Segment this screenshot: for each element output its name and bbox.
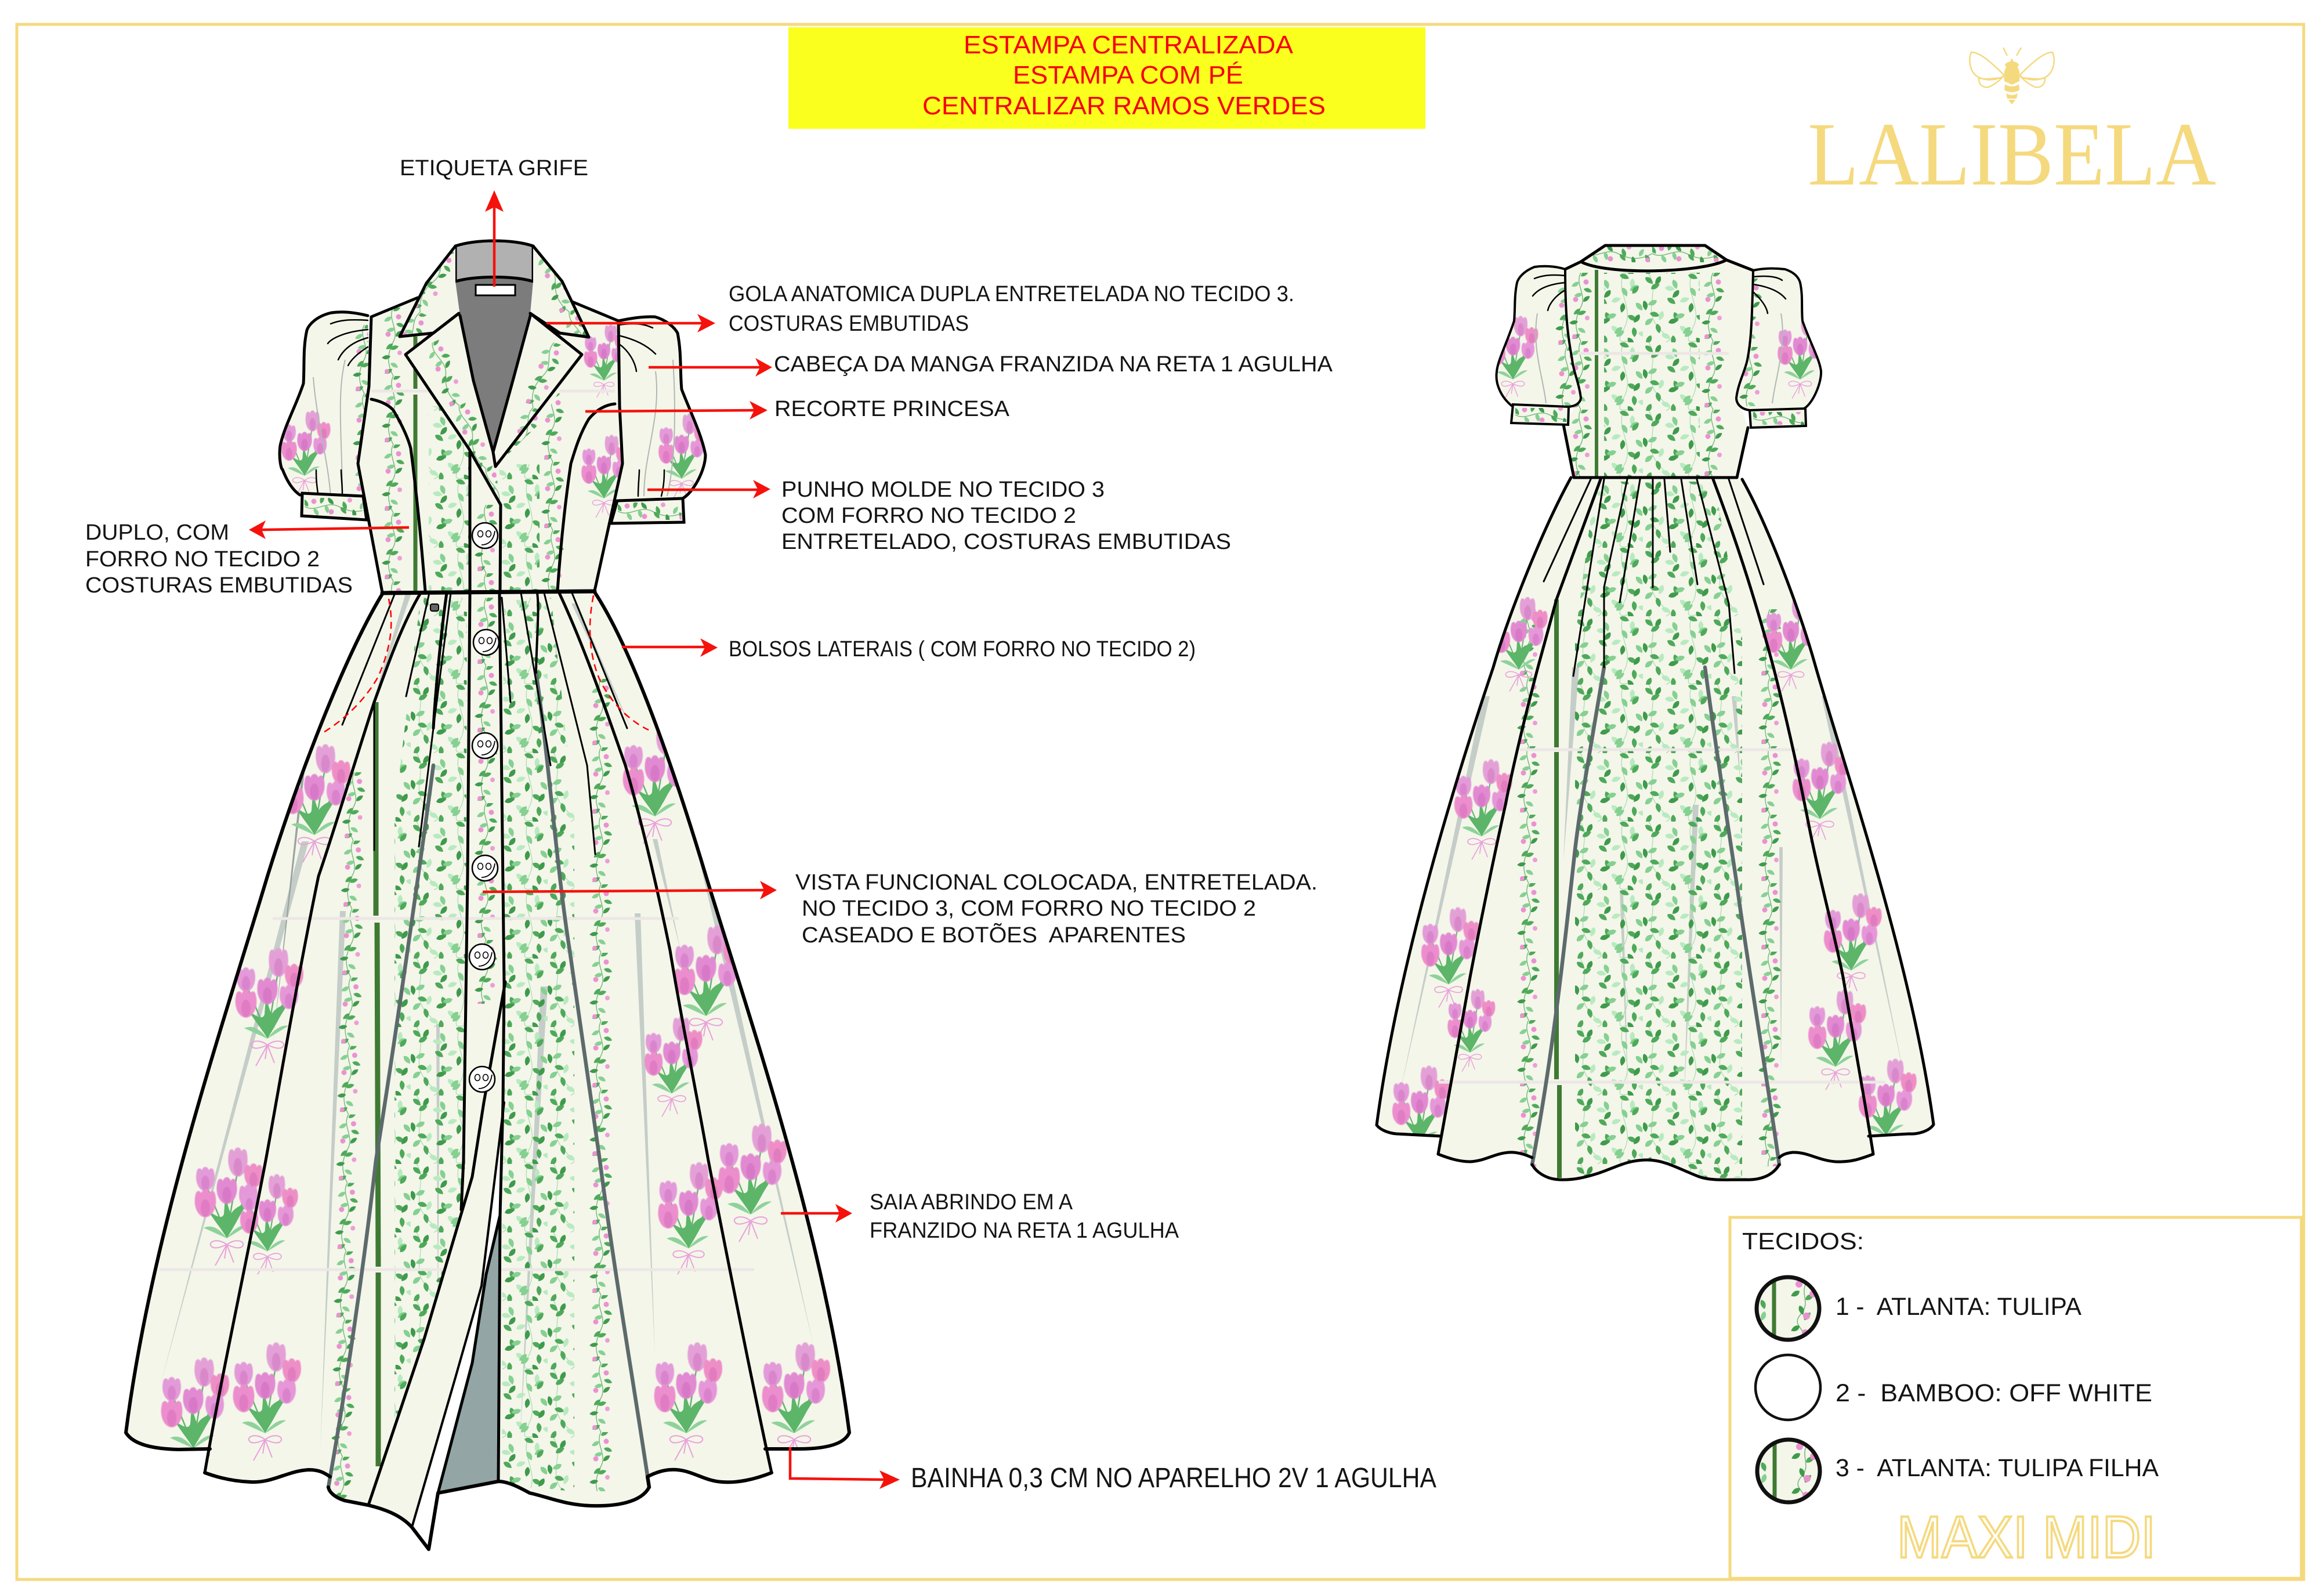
label 2: 2 - BAMBOO: OFF WHITE bbox=[1836, 1379, 2152, 1407]
buttons bbox=[469, 523, 499, 1092]
logo bbox=[1808, 48, 2216, 204]
callout: punho: COM FORRO NO TECIDO 2 bbox=[781, 504, 1076, 528]
callout: punho: PUNHO MOLDE NO TECIDO 3 bbox=[781, 478, 1105, 502]
callout: bainha: BAINHA 0,3 CM NO APARELHO 2V 1 AGULHA bbox=[911, 1463, 1436, 1494]
front right sleeve bbox=[611, 317, 708, 523]
back collar bbox=[1581, 244, 1726, 271]
back skirt bbox=[1377, 478, 1934, 1180]
loop bbox=[430, 604, 439, 611]
callout: bainha bbox=[790, 1447, 1436, 1494]
neck opening bbox=[455, 241, 533, 452]
callout: gola bbox=[546, 282, 1294, 336]
panel heading: TECIDOS: bbox=[1742, 1228, 1864, 1255]
callout: saia: SAIA ABRINDO EM A bbox=[870, 1190, 1073, 1214]
back bodice bbox=[1562, 245, 1753, 478]
callout: duplo: COSTURAS EMBUTIDAS bbox=[85, 573, 353, 598]
princess seams bbox=[371, 399, 615, 591]
callout: etiqueta grife bbox=[400, 156, 588, 287]
callout: recorte princesa bbox=[585, 397, 1010, 421]
icon: bee bbox=[1970, 48, 2054, 104]
collar and lapels bbox=[398, 245, 591, 505]
skirt seams bbox=[205, 593, 772, 1527]
callout: saia bbox=[781, 1190, 1179, 1243]
label 3: 3 - ATLANTA: TULIPA FILHA bbox=[1836, 1454, 2159, 1482]
model name: MAXI MIDI bbox=[1897, 1504, 2156, 1570]
swatch 1 bbox=[1757, 1274, 1819, 1343]
front skirt bbox=[126, 592, 849, 1549]
callout: vista: VISTA FUNCIONAL COLOCADA, ENTRETELADA. bbox=[795, 870, 1317, 895]
banner: print instructions: ESTAMPA COM PÉ bbox=[1013, 61, 1243, 89]
banner: print instructions: CENTRALIZAR RAMOS VERDES bbox=[922, 92, 1326, 120]
gather lines bbox=[342, 593, 627, 854]
callout: vista bbox=[483, 870, 1317, 948]
callout: punho bbox=[647, 478, 1231, 554]
callout: bolsos: BOLSOS LATERAIS ( COM FORRO NO TECIDO 2) bbox=[729, 637, 1196, 661]
callout: gola: GOLA ANATOMICA DUPLA ENTRETELADA NO TECIDO 3. bbox=[729, 282, 1294, 306]
skirt print bbox=[160, 592, 830, 1503]
swatch 2 bbox=[1755, 1355, 1820, 1420]
front bodice bbox=[356, 285, 624, 595]
callout: saia: FRANZIDO NA RETA 1 AGULHA bbox=[870, 1219, 1179, 1243]
callout: punho: ENTRETELADO, COSTURAS EMBUTIDAS bbox=[781, 530, 1231, 554]
front left sleeve bbox=[278, 310, 369, 521]
back left sleeve bbox=[1490, 266, 1586, 425]
callout: cabeça da manga: CABEÇA DA MANGA FRANZIDA NA RETA 1 AGULHA bbox=[774, 352, 1333, 377]
swatch 3 bbox=[1757, 1436, 1820, 1506]
back gather lines bbox=[1544, 479, 1764, 676]
outline bbox=[126, 593, 849, 1549]
callout: duplo: DUPLO, COM bbox=[85, 520, 229, 545]
callout: duplo bbox=[85, 520, 409, 598]
back right sleeve bbox=[1732, 269, 1825, 428]
banner: print instructions bbox=[788, 27, 1425, 129]
wordmark: LALIBELA bbox=[1808, 104, 2216, 204]
callout: etiqueta grife: ETIQUETA GRIFE bbox=[400, 156, 588, 180]
callout: duplo: FORRO NO TECIDO 2 bbox=[85, 547, 320, 572]
placket flap bbox=[394, 1021, 502, 1462]
pocket stitching bbox=[321, 595, 649, 734]
label 1: 1 - ATLANTA: TULIPA bbox=[1836, 1293, 2082, 1321]
callout: recorte princesa: RECORTE PRINCESA bbox=[774, 397, 1010, 421]
front dress bbox=[126, 241, 849, 1549]
panel: tecidos bbox=[1730, 1217, 2301, 1578]
callout: gola: COSTURAS EMBUTIDAS bbox=[729, 312, 969, 336]
garment label bbox=[476, 285, 515, 295]
callout: vista: CASEADO E BOTÕES APARENTES bbox=[802, 922, 1186, 948]
skirt opening bbox=[438, 1215, 500, 1493]
banner: print instructions: ESTAMPA CENTRALIZADA bbox=[964, 31, 1294, 59]
callout: vista: NO TECIDO 3, COM FORRO NO TECIDO 2 bbox=[802, 896, 1256, 921]
back dress bbox=[1377, 244, 1934, 1180]
